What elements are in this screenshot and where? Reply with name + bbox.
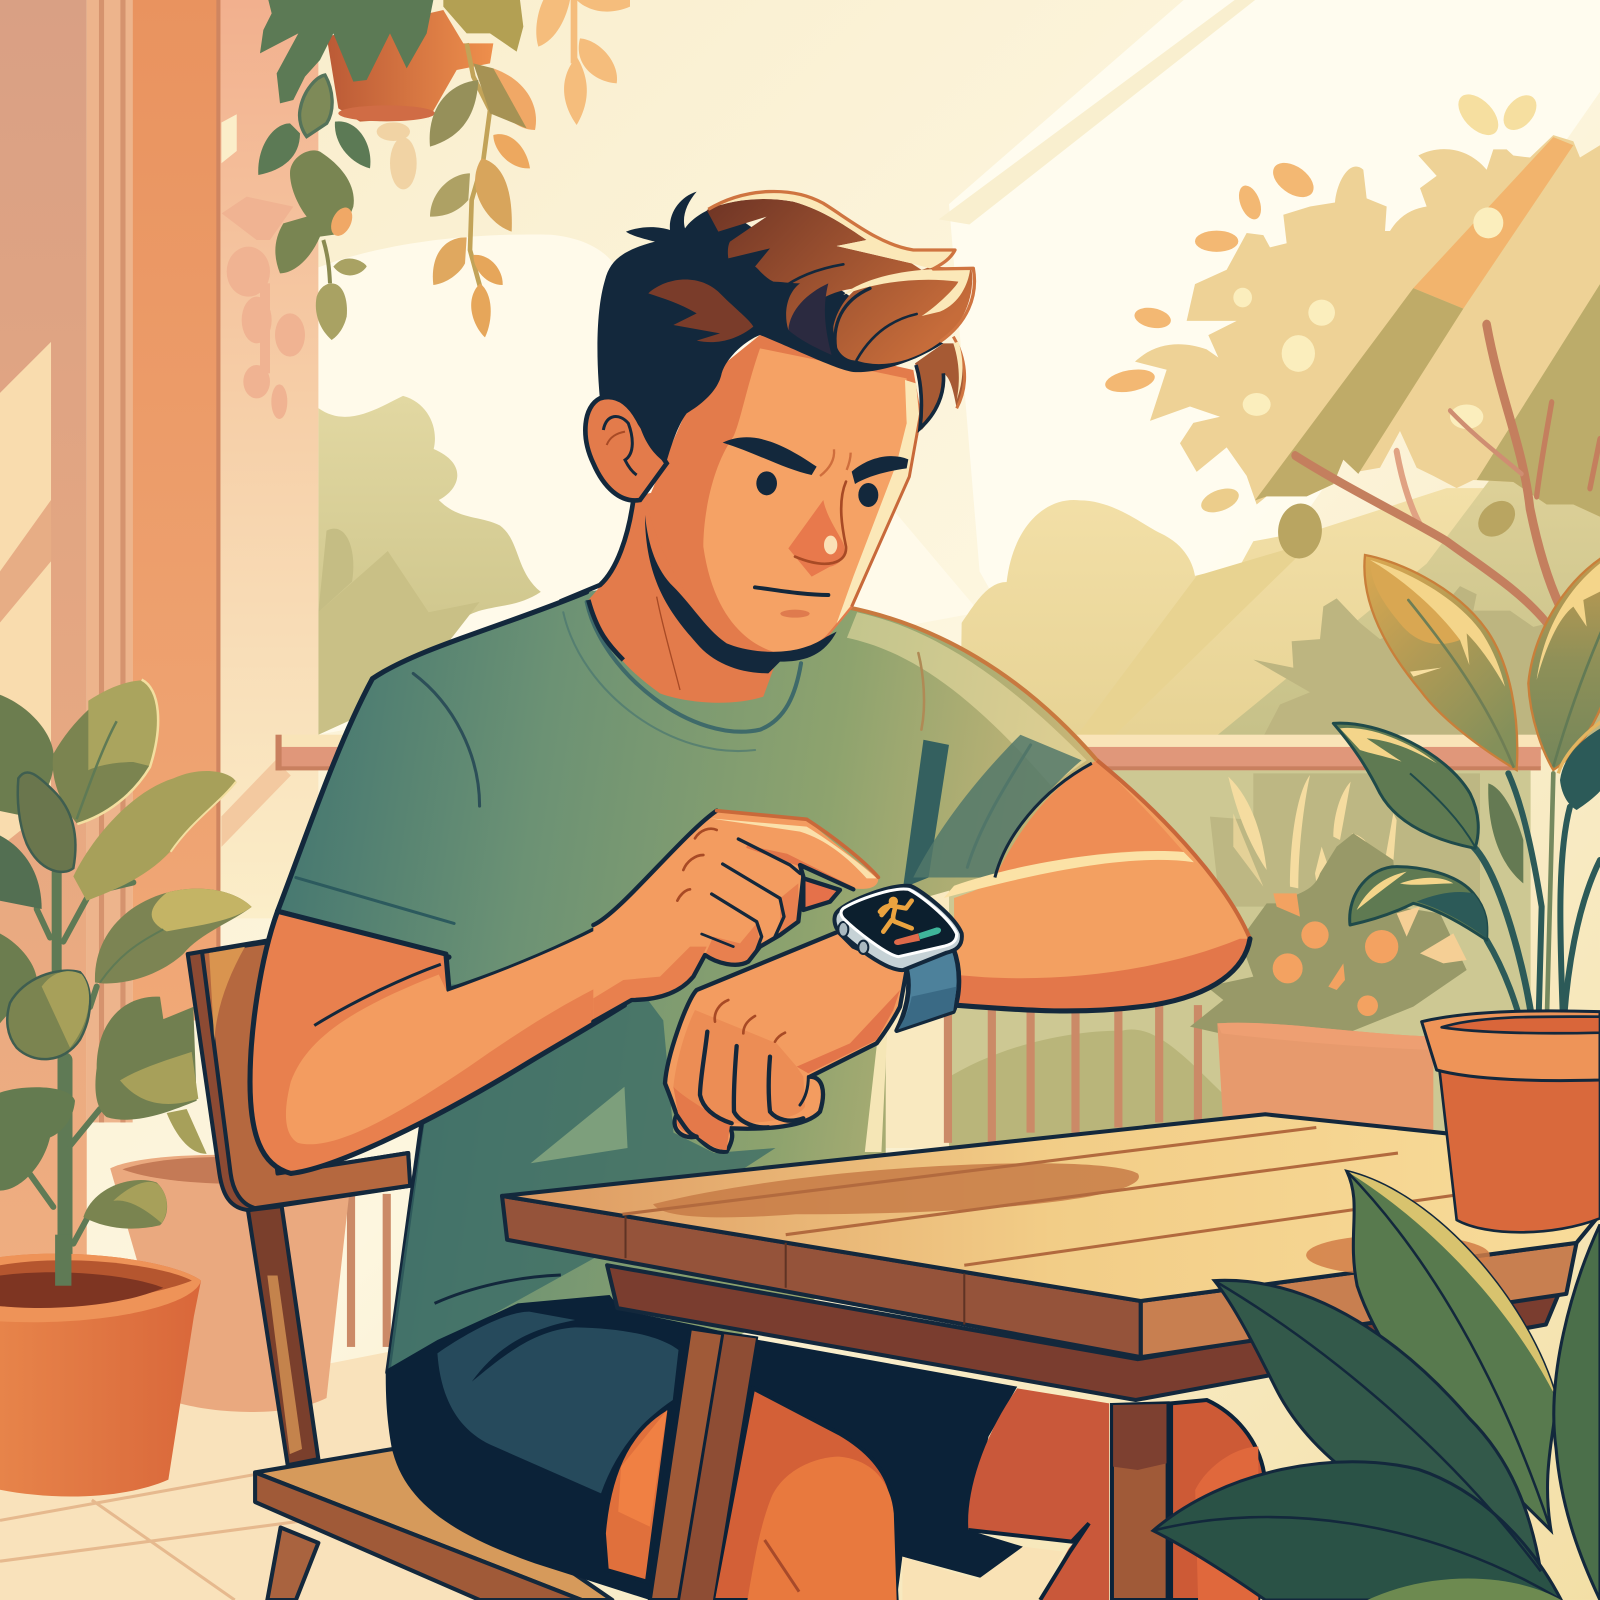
chair seat and legs <box>255 1449 612 1600</box>
dark leaf mass <box>260 0 433 103</box>
right vine leaves <box>430 0 536 337</box>
shorts light area <box>437 1312 679 1493</box>
shirt lower shadow <box>388 980 776 1372</box>
middle plant with orange fruit <box>1190 773 1480 1133</box>
leaf dark mid left <box>1333 723 1478 848</box>
round leaf <box>7 971 90 1059</box>
leaf right long <box>73 771 237 901</box>
left pot plant <box>0 680 252 1284</box>
hair dark lock <box>788 283 832 355</box>
watch case <box>834 886 962 970</box>
leaf large right gold <box>1528 557 1600 770</box>
terrace floor <box>0 1352 531 1600</box>
right eyebrow <box>852 456 908 484</box>
table top <box>502 1114 1600 1301</box>
centre knee <box>713 1388 897 1600</box>
diagonal light planes <box>1067 541 1313 749</box>
leaf lower <box>1350 867 1487 940</box>
leaf teal right <box>1560 727 1600 810</box>
right thigh <box>968 1388 1109 1600</box>
sun rays in sky <box>939 0 1600 735</box>
shorts base <box>386 1295 1023 1600</box>
orange sun band <box>1413 137 1573 309</box>
shirt <box>278 571 1097 1372</box>
smartwatch <box>834 886 962 1031</box>
left upper arm and forearm <box>250 911 624 1173</box>
nose <box>788 500 845 577</box>
left wall and pillar <box>0 0 318 1327</box>
back pot left <box>110 1155 352 1412</box>
right pot <box>1422 1011 1600 1232</box>
ear <box>585 397 667 500</box>
chair post <box>248 1206 318 1465</box>
side hair patch <box>648 280 753 342</box>
balcony railing <box>276 735 1541 1347</box>
shorts and legs <box>386 1275 1264 1600</box>
leaf mid left <box>0 933 37 1023</box>
olive sun band <box>1255 288 1463 500</box>
table shading <box>653 1163 1139 1217</box>
bush upper fronds <box>1210 773 1480 907</box>
distant bushes left <box>318 396 541 735</box>
neck <box>588 470 827 703</box>
leaf dark left <box>0 836 42 909</box>
silhouette foliage <box>1253 586 1600 749</box>
left eyebrow <box>723 437 817 475</box>
leaf dark middle <box>1488 783 1523 883</box>
pointing hand <box>593 811 878 1022</box>
pink wall leaves <box>222 122 417 419</box>
left vine leaves <box>258 75 370 340</box>
man <box>250 191 1264 1600</box>
canopy light spots <box>1233 207 1503 429</box>
orange pot left <box>0 1235 201 1496</box>
face light <box>703 348 907 652</box>
brow wrinkles <box>820 449 851 476</box>
left knee <box>604 1407 670 1582</box>
olive shadow of canopy <box>1477 284 1600 517</box>
running figure icon <box>880 897 912 932</box>
lower hand <box>665 932 907 1152</box>
table leg centre <box>1112 1403 1168 1600</box>
soft cloud behind head <box>318 234 980 735</box>
cream floor between legs <box>902 1547 1063 1600</box>
hair blond highlights <box>708 191 955 268</box>
neck and head <box>560 191 974 703</box>
shirt dark fold <box>903 740 949 888</box>
leaf right cluster <box>95 997 197 1120</box>
eyes <box>756 471 777 495</box>
mouth <box>755 587 828 595</box>
tree branches <box>1295 325 1600 623</box>
hair brown top <box>707 199 972 364</box>
distant bushes right and tree canopy <box>960 86 1600 749</box>
foreground leaves <box>1153 1171 1600 1600</box>
plant stems <box>30 872 133 1284</box>
leaf right lower <box>95 889 252 983</box>
tree canopy <box>1135 135 1600 517</box>
status bar <box>894 927 941 945</box>
watch buttons <box>838 922 848 937</box>
head base <box>647 335 922 660</box>
jaw shadow <box>645 515 837 673</box>
right potted plant <box>1333 555 1600 1232</box>
watch strap <box>897 948 959 1031</box>
separate falling leaves <box>1104 86 1542 568</box>
face rim highlight <box>837 380 919 623</box>
watch screen <box>841 889 957 957</box>
far bushes <box>960 488 1600 749</box>
table lower rail <box>607 1265 1561 1400</box>
hair strands <box>688 264 917 360</box>
leaf bottom <box>83 1180 167 1229</box>
table leg left <box>650 1328 756 1600</box>
right upper arm and forearm <box>944 760 1250 1011</box>
hanging pot <box>327 10 493 122</box>
leaf small back <box>167 1109 207 1154</box>
terracotta pot, middle <box>1217 1023 1433 1133</box>
hanging plant at top <box>222 0 630 419</box>
table apron <box>502 1196 1141 1357</box>
shirt crease <box>435 1275 561 1303</box>
hands <box>593 811 907 1152</box>
leaf back left <box>0 695 54 815</box>
fruits <box>1273 893 1467 1016</box>
leaf upper outlined <box>18 772 75 872</box>
leaf large left gold <box>1364 555 1517 770</box>
leaf top large <box>53 680 158 823</box>
hair back strand <box>915 343 965 430</box>
hair dark <box>597 192 943 463</box>
leaf lower left <box>0 1087 75 1191</box>
right leg far <box>1171 1400 1264 1600</box>
bush body <box>1190 833 1467 1033</box>
far orange leaves <box>536 0 630 125</box>
shirt outlines <box>278 592 1097 1372</box>
table <box>502 1114 1600 1400</box>
chair back <box>188 939 410 1465</box>
stems <box>1473 773 1600 1030</box>
